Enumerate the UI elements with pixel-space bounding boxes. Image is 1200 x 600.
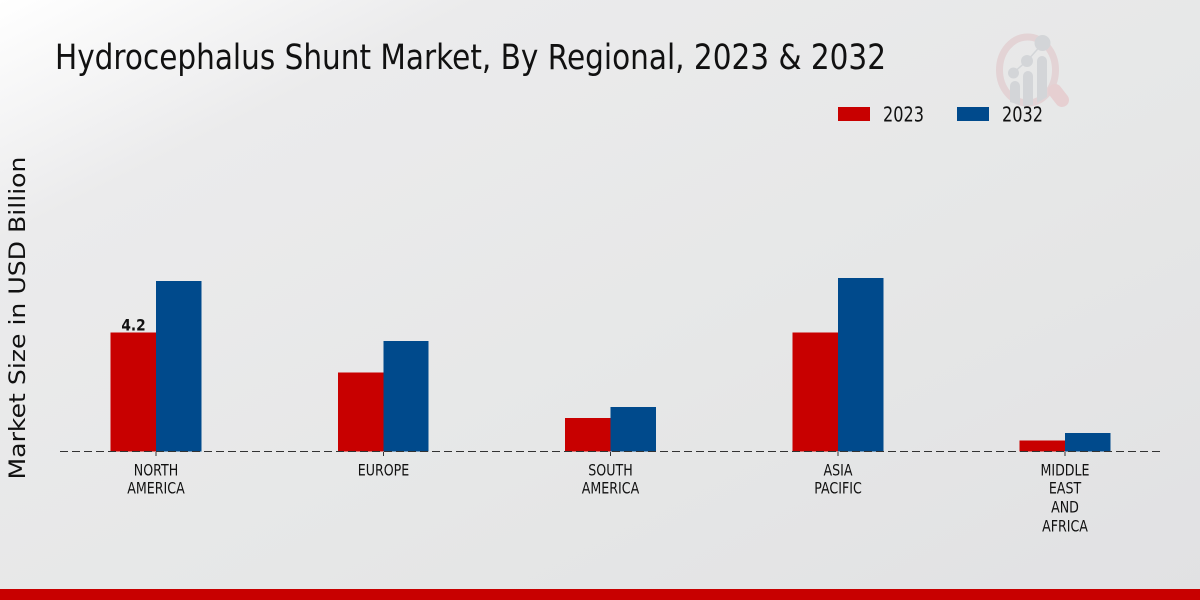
legend [838,102,1043,126]
title: Hydrocephalus Shunt Market, By Regional, 2023 & 2032 [55,38,886,78]
bars: South America [565,407,656,452]
label: Middle East and Africa: AFRICA [1042,518,1088,536]
label: Asia Pacific: PACIFIC [814,480,862,498]
bars: Asia Pacific [792,278,884,452]
label: North America: NORTH [134,462,178,480]
legend item: 2032 [957,102,1043,126]
y-axis label: Market Size in USD Billion [5,156,31,480]
legend item: 2023: 2023 [883,102,924,126]
footer bar [0,589,1200,600]
legend item: 2032: 2032 [1002,102,1043,126]
label: Middle East and Africa: AND [1051,499,1079,517]
bars: Middle East and Africa [1020,433,1110,452]
label: South America: SOUTH [588,462,633,480]
label: Middle East and Africa: MIDDLE [1040,462,1090,480]
legend item: 2023 [838,102,924,126]
label: Europe: EUROPE [358,462,409,480]
bars: North America [110,281,202,452]
x-axis category labels [127,462,1090,536]
label: Middle East and Africa: EAST [1049,480,1081,498]
bar chart [60,278,1160,456]
icon: watermark logo [1000,35,1062,106]
label: Asia Pacific: ASIA [823,462,853,480]
value label: 4.2: 4.2 [121,315,146,335]
label: South America: AMERICA [582,480,639,498]
label: North America: AMERICA [127,480,185,498]
bars: Europe [338,341,428,452]
